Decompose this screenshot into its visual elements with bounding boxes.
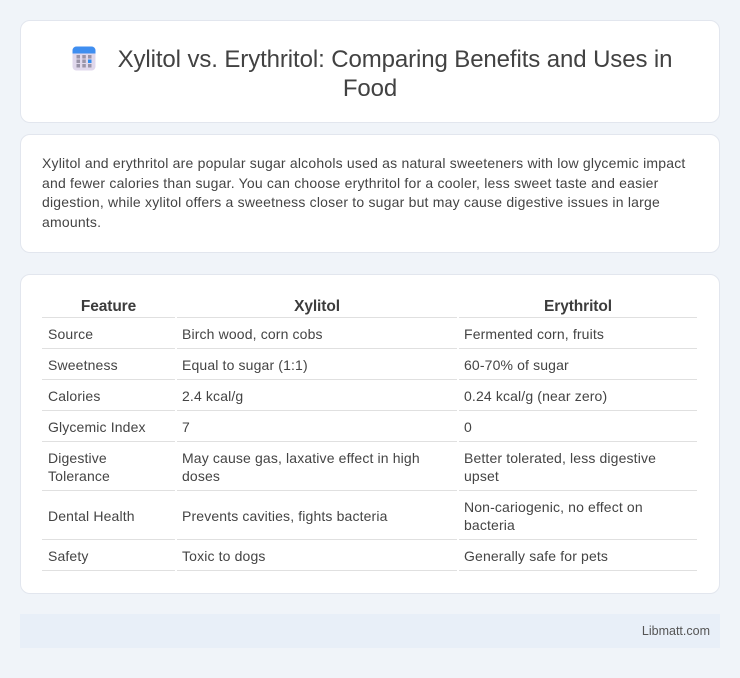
row: sweetness: Equal to sugar (1:1) [182, 357, 308, 373]
row: dental health: Prevents cavities, fights bacteria [182, 508, 388, 524]
row: calories: Calories [48, 388, 100, 404]
footer source text: Libmatt.com [642, 624, 710, 638]
row: source [42, 326, 697, 349]
row: digestive tolerance: Digestive [48, 450, 107, 466]
row: dental health: Dental Health [48, 508, 135, 524]
footer bar [20, 614, 720, 648]
title: Xylitol vs. Erythritol: Comparing Benefits and Uses in [118, 46, 672, 73]
row: sweetness [42, 357, 697, 380]
title: Food [343, 75, 397, 102]
intro text: amounts. [42, 214, 101, 230]
table header: Xylitol [294, 298, 340, 315]
row: calories [42, 388, 697, 411]
intro card [20, 134, 720, 253]
row: safety: Toxic to dogs [182, 548, 266, 564]
comparison table [42, 298, 697, 571]
intro text: and fewer calories than sugar. You can choose erythritol for a cooler, less sweet taste and easier [42, 174, 659, 190]
row: glycemic index: 0 [464, 419, 472, 435]
row: digestive tolerance: Tolerance [48, 468, 110, 484]
row: digestive tolerance: May cause gas, laxative effect in high [182, 450, 420, 466]
icon: calendar [72, 46, 96, 70]
row: calories: 0.24 kcal/g (near zero) [464, 388, 607, 404]
table header: Erythritol [544, 298, 612, 315]
intro text: Xylitol and erythritol are popular sugar alcohols used as natural sweeteners with low glycemic impact [42, 155, 686, 171]
title [118, 46, 672, 102]
intro text: digestion, while xylitol offers a sweetness closer to sugar but may cause digestive issues in large [42, 194, 660, 210]
row: calories: 2.4 kcal/g [182, 388, 243, 404]
row: sweetness: Sweetness [48, 357, 118, 373]
row: sweetness: 60-70% of sugar [464, 357, 569, 373]
row: safety: Safety [48, 548, 89, 564]
row: dental health: bacteria [464, 517, 515, 533]
row: glycemic index: Glycemic Index [48, 419, 146, 435]
row: digestive tolerance: doses [182, 468, 220, 484]
table card [20, 274, 720, 594]
row: source: Birch wood, corn cobs [182, 326, 323, 342]
row: dental health: Non-cariogenic, no effect on [464, 499, 643, 515]
row: safety: Generally safe for pets [464, 548, 608, 564]
row: safety [42, 548, 697, 571]
table header: Feature [81, 298, 136, 315]
intro text [42, 155, 686, 230]
row: source: Fermented corn, fruits [464, 326, 604, 342]
row: glycemic index: 7 [182, 419, 190, 435]
row: digestive tolerance: upset [464, 468, 499, 484]
row: glycemic index [42, 419, 697, 442]
row: dental health [42, 499, 697, 540]
row: source: Source [48, 326, 93, 342]
table header [42, 298, 697, 318]
row: digestive tolerance: Better tolerated, less digestive [464, 450, 656, 466]
header card [20, 20, 720, 123]
row: digestive tolerance [42, 450, 697, 491]
